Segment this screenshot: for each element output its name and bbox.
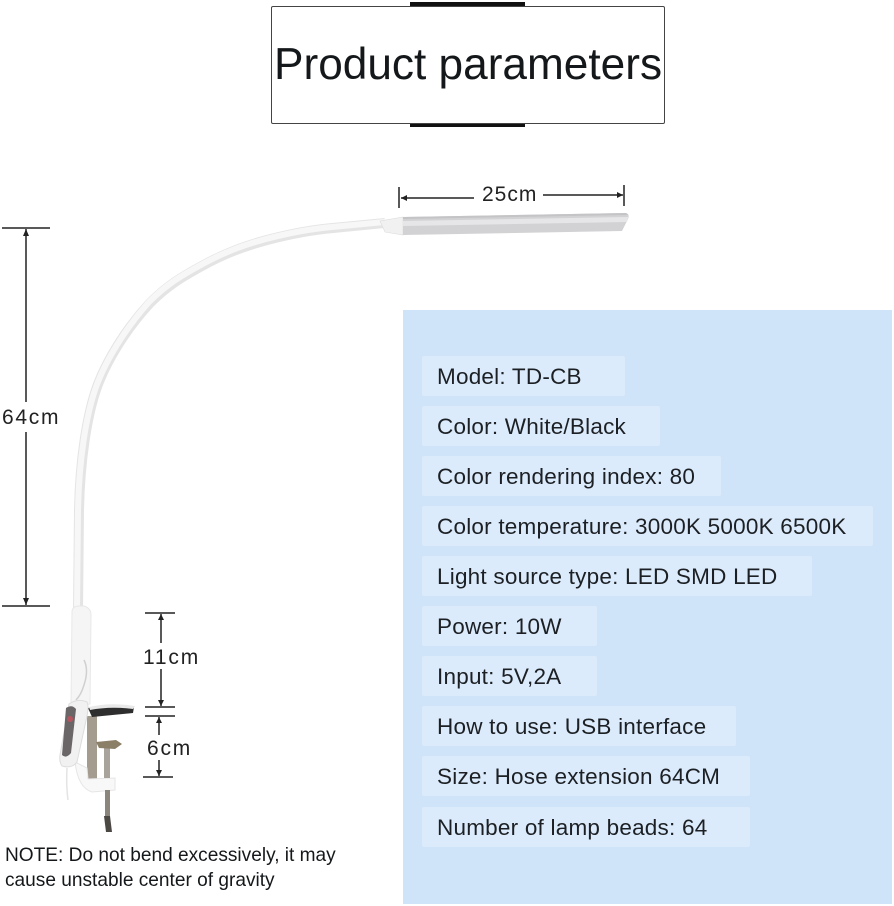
spec: model: Model: TD-CB (437, 364, 582, 389)
spec: color (422, 406, 660, 446)
spec: light source type: Light source type: LED SMD LED (437, 564, 778, 589)
spec: color temperature: Color temperature: 3000K 5000K 6500K (437, 514, 846, 539)
spec: light source type (422, 556, 812, 596)
spec: color rendering index (422, 456, 721, 496)
note text (5, 845, 336, 891)
spec: size: Size: Hose extension 64CM (437, 764, 720, 789)
clamp top arm (88, 705, 134, 717)
title heading: Product parameters (274, 40, 662, 89)
dimension: 25cm (399, 183, 624, 208)
spec: number of lamp beads: Number of lamp beads: 64 (437, 815, 707, 840)
remote control (60, 700, 88, 767)
dimension: 11cm: 11cm (143, 646, 200, 669)
title frame (271, 6, 665, 124)
spec: power: Power: 10W (437, 614, 562, 639)
dimension: 64cm: 64cm (2, 406, 60, 429)
lamp: clamp base (60, 606, 135, 832)
dimension: 64cm (2, 228, 60, 606)
clamp lower arm (75, 762, 115, 792)
dimension: 6cm: 6cm (147, 737, 192, 760)
dimension: 11cm (143, 613, 200, 707)
screw (104, 747, 110, 778)
lamp: head (380, 213, 629, 235)
spec: how to use (422, 706, 736, 746)
lamp: gooseneck (77, 222, 385, 610)
note text: cause unstable center of gravity (5, 870, 275, 891)
dimension: 6cm (143, 716, 192, 777)
bottom accent bar (410, 124, 525, 127)
spec: how to use: How to use: USB interface (437, 714, 706, 739)
spec: model (422, 356, 625, 396)
spec: power (422, 606, 597, 646)
metal column (87, 716, 97, 780)
base sleeve (71, 606, 91, 706)
note text: NOTE: Do not bend excessively, it may (5, 845, 336, 866)
dimension: 25cm: 25cm (482, 183, 537, 206)
panel: specifications (403, 310, 892, 904)
top accent bar (410, 2, 525, 6)
spec: color temperature (422, 506, 873, 546)
spec: color rendering index: Color rendering index: 80 (437, 464, 695, 489)
spec: size (422, 756, 750, 796)
spec: input (422, 656, 597, 696)
title box (271, 2, 665, 127)
spec: input: Input: 5V,2A (437, 664, 561, 689)
spec: number of lamp beads (422, 807, 750, 847)
spec: color: Color: White/Black (437, 414, 626, 439)
